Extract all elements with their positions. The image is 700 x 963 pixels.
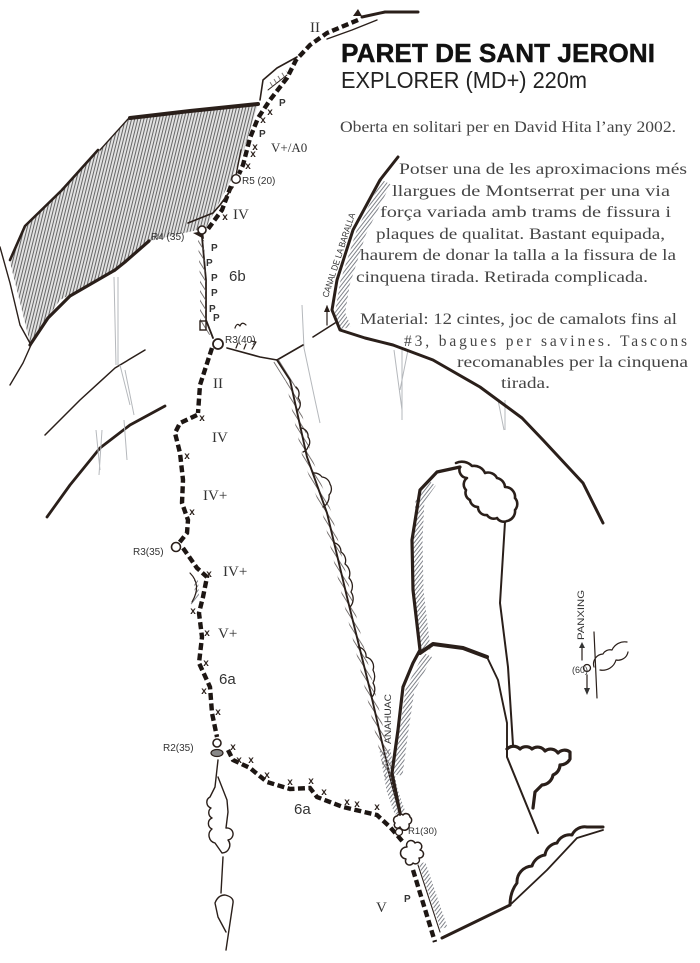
top rock edge bbox=[260, 9, 418, 100]
bolts: x bbox=[354, 799, 360, 810]
shaded cliff face bbox=[10, 104, 258, 343]
bolts: x bbox=[203, 658, 209, 669]
bush: R1 bbox=[394, 814, 424, 865]
pitons bbox=[206, 98, 411, 905]
pitch grade labels: 6a bbox=[219, 671, 236, 688]
pitons: P bbox=[211, 273, 218, 284]
pitch 6b line bbox=[193, 231, 256, 349]
text: material: #3, bagues per savines. Tascons bbox=[404, 333, 687, 350]
bolts: x bbox=[245, 161, 251, 172]
bolts: x bbox=[374, 802, 380, 813]
sector labels: CANAL DE LA BARALLA bbox=[320, 212, 357, 299]
route: middle and lower pitches bbox=[175, 348, 444, 942]
belay labels: (60) bbox=[572, 665, 588, 675]
panel: hatched rock wall bbox=[0, 104, 258, 385]
bolts: x bbox=[204, 628, 210, 639]
belay labels: R2(35) bbox=[163, 743, 194, 754]
canal curve bbox=[324, 157, 603, 523]
pitons: P bbox=[213, 313, 220, 324]
text: description: plaques de qualitat. Bastant equipada, bbox=[376, 226, 665, 243]
pitons: P bbox=[404, 894, 411, 905]
pitch grade labels: V+ bbox=[218, 626, 237, 642]
pitons: P bbox=[211, 243, 218, 254]
pitch grade labels: IV+ bbox=[203, 488, 227, 504]
left lower ledges bbox=[45, 277, 505, 517]
bolts: x bbox=[264, 770, 270, 781]
sector labels: PANXING bbox=[576, 590, 586, 640]
pitch grade labels: V+/A0 bbox=[271, 140, 307, 155]
text: description bbox=[356, 161, 687, 286]
bolts: x bbox=[344, 797, 350, 808]
belay labels bbox=[133, 176, 588, 837]
pitch grade labels: V bbox=[376, 900, 387, 916]
belay labels: R5 (20) bbox=[242, 176, 275, 187]
bolts: x bbox=[206, 569, 212, 580]
bolts: x bbox=[215, 707, 221, 718]
pitch grade labels: IV bbox=[212, 430, 228, 446]
belay labels: R1(30) bbox=[408, 826, 437, 837]
bush: lower ledge bbox=[507, 746, 570, 808]
bolts: x bbox=[308, 776, 314, 787]
bolts: x bbox=[267, 107, 273, 118]
text: description: força variada amb trams de fissura i bbox=[380, 204, 672, 221]
bolts: x bbox=[184, 451, 190, 462]
sector labels: ANAHUAC bbox=[383, 693, 393, 744]
route: upper pitches bbox=[188, 20, 358, 229]
bottom ledge bbox=[442, 905, 510, 938]
tower formations bbox=[385, 467, 513, 813]
bolts bbox=[184, 107, 380, 813]
pitch grade labels: IV bbox=[233, 207, 249, 223]
bolts: x bbox=[189, 507, 195, 518]
bush: lower left crack bbox=[207, 760, 233, 950]
bolts: x bbox=[252, 142, 258, 153]
pitons: P bbox=[211, 288, 218, 299]
belay labels: R4 (35) bbox=[151, 232, 184, 243]
bolts: x bbox=[230, 742, 236, 753]
pitch grade labels: 6b bbox=[229, 268, 246, 285]
bush: tower top bbox=[456, 462, 517, 522]
text: description: llargues de Montserrat per una via bbox=[392, 183, 670, 200]
text: description: haurem de donar la talla a la fissura de la bbox=[360, 247, 676, 264]
title: PARET DE SANT JERONI bbox=[341, 38, 655, 68]
text: material: recomanables per la cinquena bbox=[457, 354, 688, 371]
bolts: x bbox=[236, 755, 242, 766]
bolts: x bbox=[201, 686, 207, 697]
bolts: x bbox=[287, 777, 293, 788]
bolts: x bbox=[190, 606, 196, 617]
pitch grade labels: IV+ bbox=[223, 564, 247, 580]
pitch grade labels bbox=[203, 20, 387, 916]
text: material: Material: 12 cintes, joc de camalots fins al bbox=[360, 311, 677, 328]
belay stations bbox=[172, 175, 590, 835]
text: material: tirada. bbox=[501, 375, 550, 392]
pitons: P bbox=[206, 258, 213, 269]
pitch grade labels: II bbox=[310, 20, 320, 36]
belay labels: R3(40) bbox=[225, 335, 256, 346]
text: authorship: Oberta en solitari per en David Hita l’any 2002. bbox=[340, 119, 676, 136]
pitons: P bbox=[259, 129, 266, 140]
cliff outlines bbox=[0, 104, 258, 385]
sector labels bbox=[320, 212, 586, 744]
text: material bbox=[360, 311, 688, 392]
bolts: x bbox=[222, 212, 228, 223]
subtitle: EXPLORER (MD+) 220m bbox=[341, 67, 587, 93]
bolts: x bbox=[199, 413, 205, 424]
bolts: x bbox=[248, 755, 254, 766]
pitch grade labels: 6a bbox=[294, 801, 311, 818]
belay labels: R3(35) bbox=[133, 547, 164, 558]
bolts: x bbox=[321, 787, 327, 798]
bush: right ledge bbox=[594, 632, 628, 698]
text: description: cinquena tirada. Retirada complicada. bbox=[356, 269, 648, 286]
bolts: x bbox=[250, 149, 256, 160]
bolts: x bbox=[260, 115, 266, 126]
text: description: Potser una de les aproximacions més bbox=[399, 161, 687, 178]
bushes on towers and ledges bbox=[207, 462, 628, 950]
pitch grade labels: II bbox=[213, 376, 223, 392]
long crack with bushes bbox=[227, 323, 400, 815]
pitons: P bbox=[209, 304, 216, 315]
pitons: P bbox=[279, 98, 286, 109]
